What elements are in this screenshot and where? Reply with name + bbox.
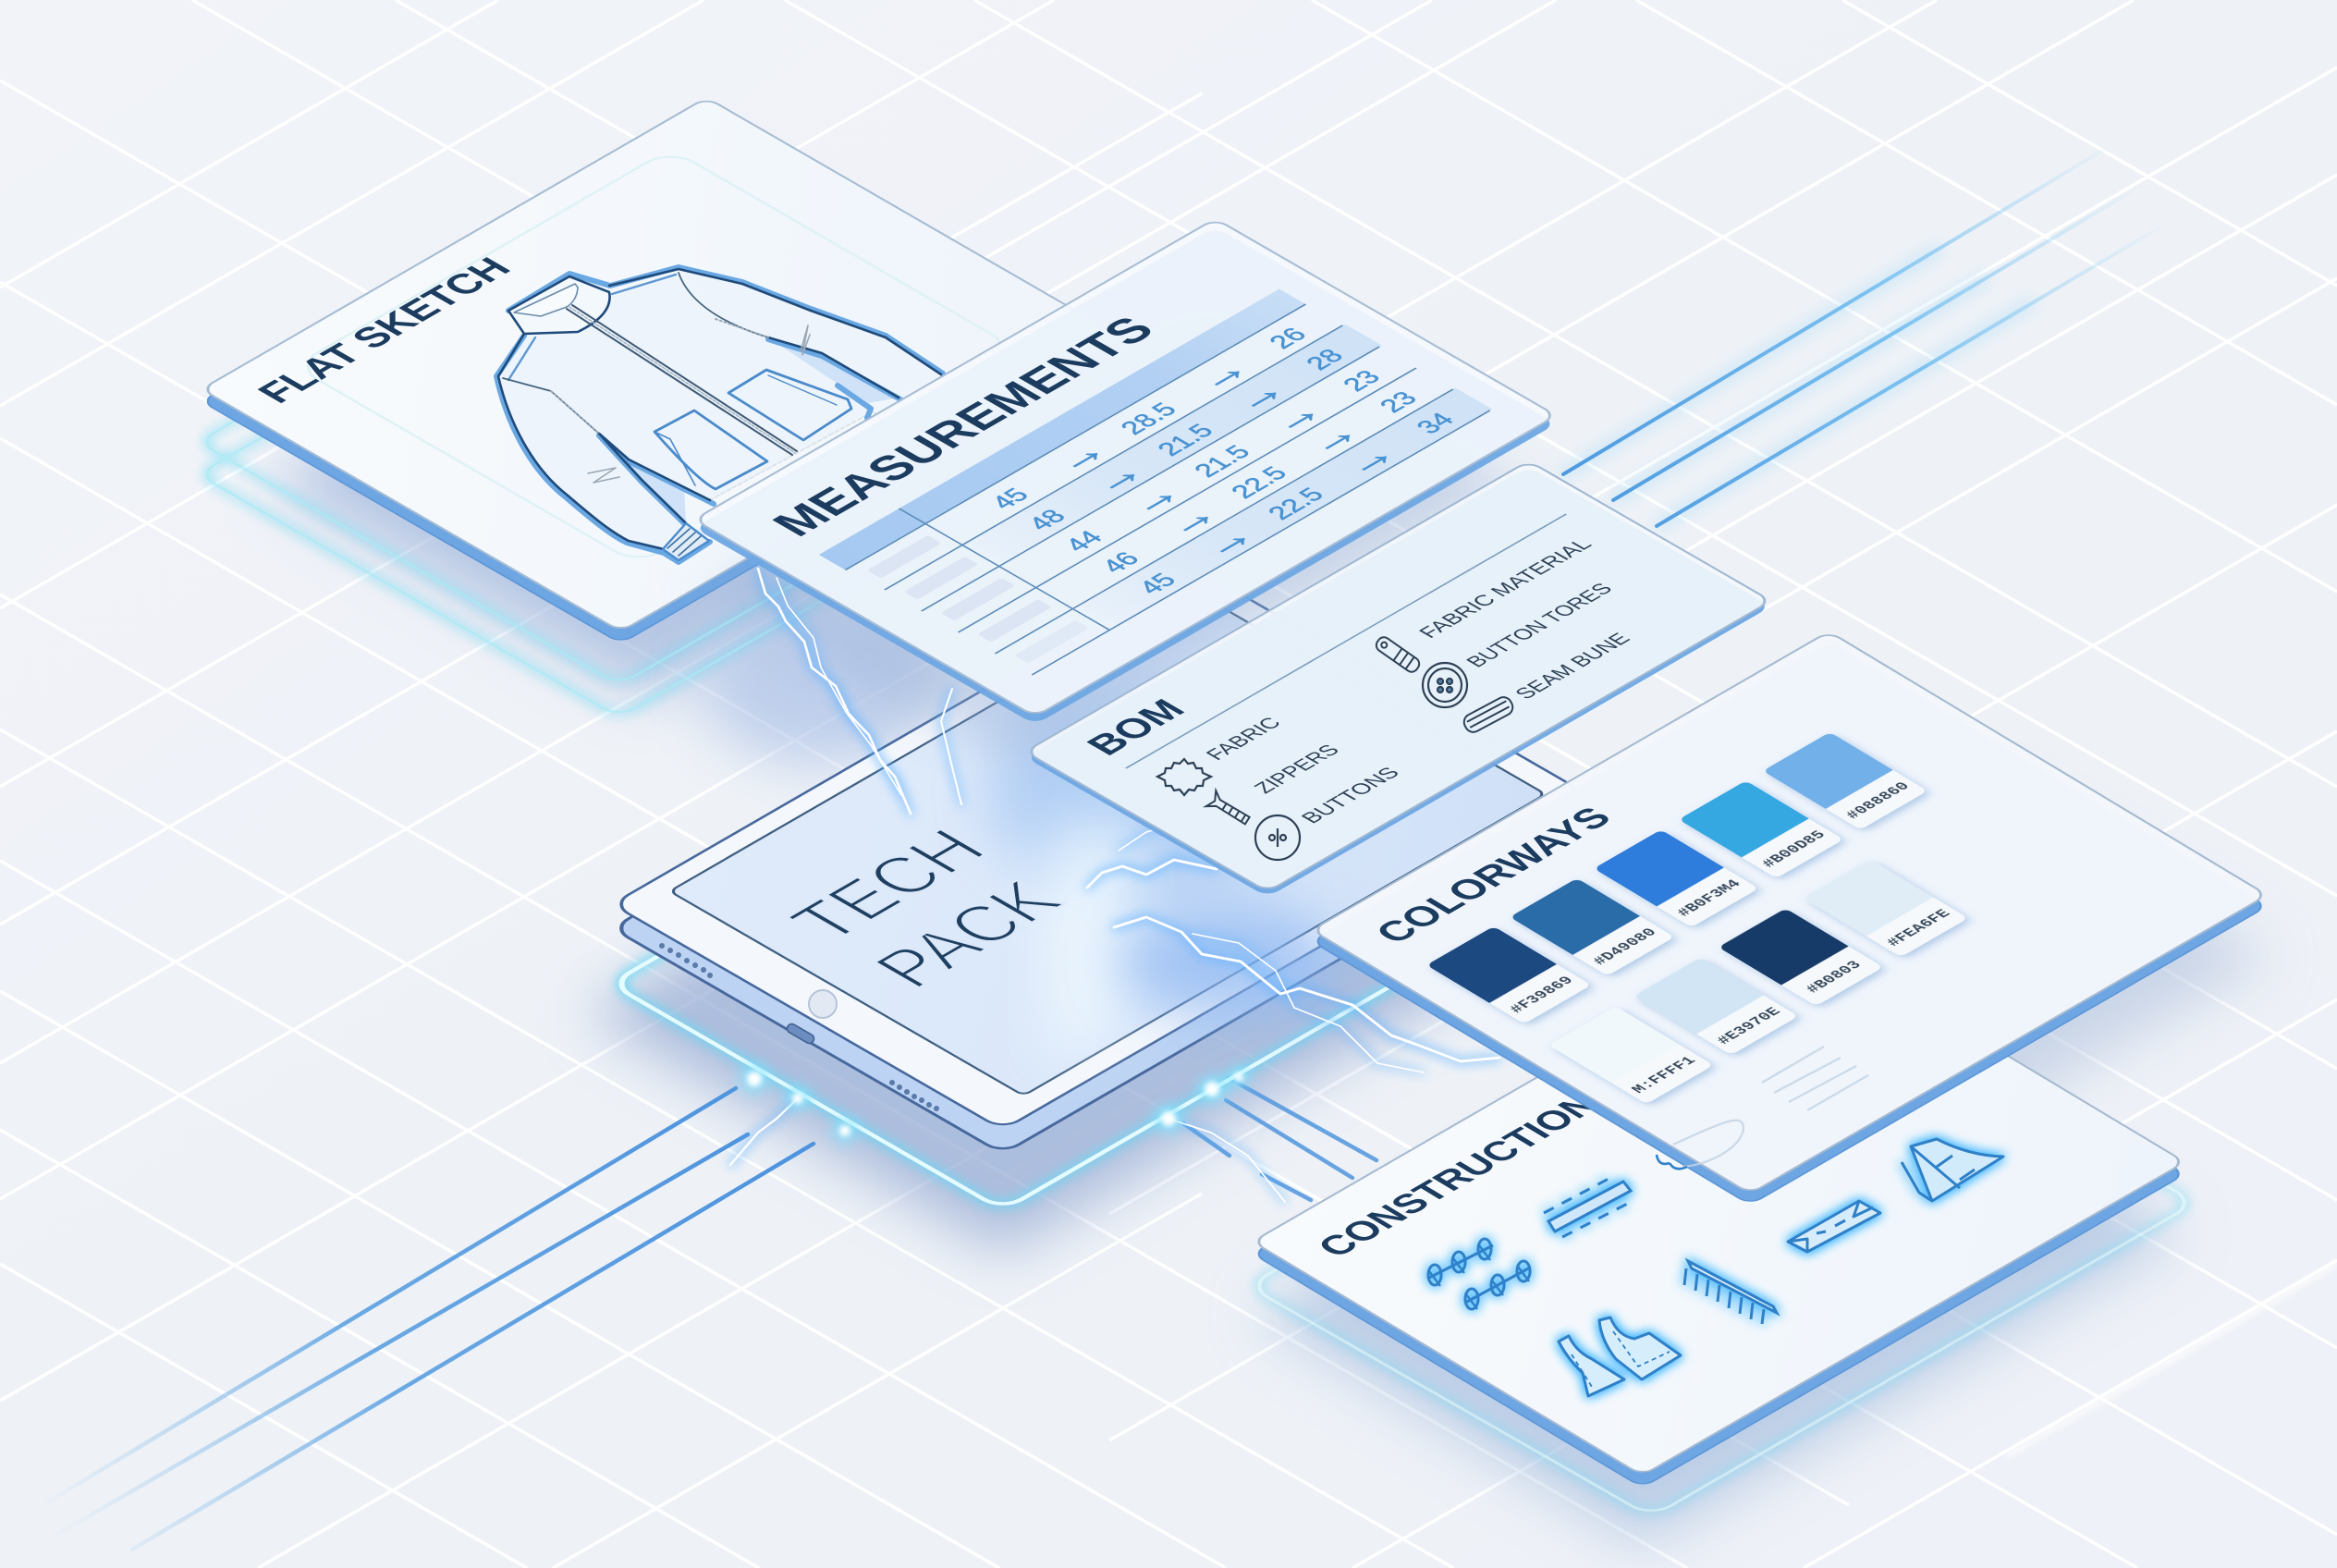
- swatch 7: [1633, 957, 1798, 1055]
- measurement values: 21.5: [1188, 441, 1256, 481]
- tablet screen: [669, 590, 1546, 1096]
- swatch 9: #FEA6FE: [1883, 907, 1955, 949]
- measurement values: →: [1217, 373, 1299, 419]
- panel: flat sketch: [202, 98, 1126, 643]
- jacket flat sketch: [496, 267, 954, 562]
- right item labels: BUTTON TORES: [1461, 580, 1618, 670]
- swatch 8: #B0803: [1803, 959, 1866, 996]
- icon: zipper: [1206, 790, 1252, 829]
- construction hook peeking below panel: [1657, 1155, 1687, 1169]
- left item labels: [1193, 704, 1404, 827]
- tablet screen beam: [1045, 814, 1137, 1063]
- measurement values: 28.5: [1114, 398, 1182, 438]
- tablet title: PACK: [857, 870, 1079, 998]
- measurement values: →: [1039, 434, 1120, 480]
- blue glow around right lightning: [1119, 906, 1340, 1017]
- icon: hand stitches: [1427, 1239, 1530, 1309]
- floor shadows under panels: [270, 203, 2270, 1544]
- tablet title: [773, 818, 1085, 999]
- swatch 5: #088860: [1842, 780, 1915, 822]
- swatch 4: [1679, 780, 1843, 878]
- icon: needle: [1374, 635, 1422, 674]
- icon: vest pattern pieces: [1559, 1317, 1681, 1396]
- measurement values: 46: [1095, 548, 1145, 577]
- swatch 3: [1594, 829, 1759, 927]
- bright glow highlights on grid: [2006, 1264, 2337, 1456]
- left item labels: FABRIC: [1200, 714, 1286, 764]
- tablet charging port: [786, 1023, 815, 1045]
- swatch 2: [1510, 878, 1675, 975]
- right item labels: [1409, 535, 1697, 703]
- measurement values: 22.5: [1225, 462, 1293, 502]
- measurement values: 48: [1022, 506, 1071, 534]
- blue shadow between sketch and tablet: [703, 606, 943, 763]
- hem ribbing: [710, 411, 884, 513]
- panel: measurements: [694, 218, 1556, 725]
- icon: hem ruler: [1684, 1261, 1777, 1324]
- soft glow beneath upper right connectors: [1563, 248, 2034, 526]
- swatch 6: [1548, 1006, 1714, 1104]
- measurement values: →: [1150, 497, 1230, 544]
- neon frames under flat sketch: [198, 150, 1126, 717]
- swatch 7: #E3970E: [1713, 1005, 1785, 1047]
- right item labels: SEAM BUNE: [1510, 630, 1635, 703]
- icon: folded envelope seam: [1788, 1201, 1880, 1252]
- measurement values: →: [1181, 351, 1262, 398]
- right item labels: FABRIC MATERIAL: [1413, 535, 1597, 642]
- neon flares: [741, 1066, 1248, 1142]
- shadow beneath measurements: [721, 310, 1513, 767]
- swatch 4: #B00D85: [1758, 828, 1830, 871]
- measurement values: →: [1113, 476, 1193, 522]
- measurement table: [819, 288, 1496, 679]
- connector lines lower centre: [1183, 1078, 1377, 1200]
- left item labels: ZIPPERS: [1248, 741, 1344, 797]
- measurement values: 34: [1410, 409, 1460, 437]
- swatch 9: [1804, 859, 1968, 957]
- icon: sleeve placket: [1902, 1139, 2003, 1201]
- measurement values: →: [1328, 436, 1409, 483]
- measurement values: 23: [1374, 387, 1423, 416]
- icon: seam roll: [1462, 694, 1515, 735]
- swatch 2: #D49080: [1590, 926, 1662, 968]
- measurement values: →: [1254, 394, 1335, 440]
- swatch 8: [1719, 908, 1883, 1006]
- placeholder row labels: [867, 535, 1089, 664]
- panel: construction: [1253, 928, 2185, 1488]
- icon: button with rim: [1423, 663, 1467, 707]
- measurement values: [974, 318, 1467, 602]
- measurement values: 28: [1300, 345, 1350, 374]
- measurement values: →: [1076, 455, 1156, 501]
- panel: bom: [1025, 460, 1771, 897]
- heading: construction: CONSTRUCTION: [1308, 1088, 1609, 1263]
- measurement values: 23: [1337, 366, 1387, 395]
- swatch 5: [1763, 732, 1927, 829]
- swatch 6: M:FFFF1: [1629, 1054, 1701, 1096]
- measurement values: 45: [985, 484, 1034, 513]
- swatch 3: #B0F3M4: [1673, 877, 1746, 920]
- faint sketch lines through panel: [1673, 1047, 1868, 1167]
- neon frame under tablet: [610, 646, 1587, 1210]
- swatch 1: [1426, 926, 1592, 1023]
- heading: measurements: MEASUREMENTS: [762, 310, 1167, 544]
- glowing connector lines upper right: [1563, 151, 2184, 526]
- icon: fabric swatch: [1157, 759, 1211, 795]
- panel: colorways: [1312, 631, 2268, 1205]
- measurement values: 21.5: [1151, 420, 1219, 459]
- measurement values: 22.5: [1262, 484, 1330, 523]
- neon frame under construction panel: [1248, 972, 2196, 1517]
- tablet speaker dots: [659, 943, 939, 1111]
- glowing connector lines lower left: [23, 1088, 814, 1554]
- heading: flat sketch: FLAT SKETCH: [249, 251, 520, 410]
- heading: colorways: COLORWAYS: [1365, 801, 1621, 949]
- tablet title: TECH: [773, 818, 1003, 951]
- measurement values: 26: [1263, 324, 1313, 352]
- measurement values: →: [1186, 519, 1267, 565]
- tablet screen glow: [989, 693, 1303, 897]
- left item labels: BUTTONS: [1296, 764, 1404, 827]
- tablet home button: [809, 990, 837, 1018]
- panel: tablet: [612, 568, 1585, 1154]
- heading: bom: BOM: [1077, 693, 1194, 761]
- icon: bom button: [1255, 815, 1300, 860]
- swatch 1: #F39869: [1506, 974, 1579, 1016]
- measurement values: 44: [1058, 527, 1108, 556]
- measurement values: →: [1291, 415, 1372, 461]
- icon: seam strip: [1544, 1178, 1634, 1237]
- measurement values: 45: [1132, 570, 1182, 598]
- lightning arcs: [730, 569, 1499, 1202]
